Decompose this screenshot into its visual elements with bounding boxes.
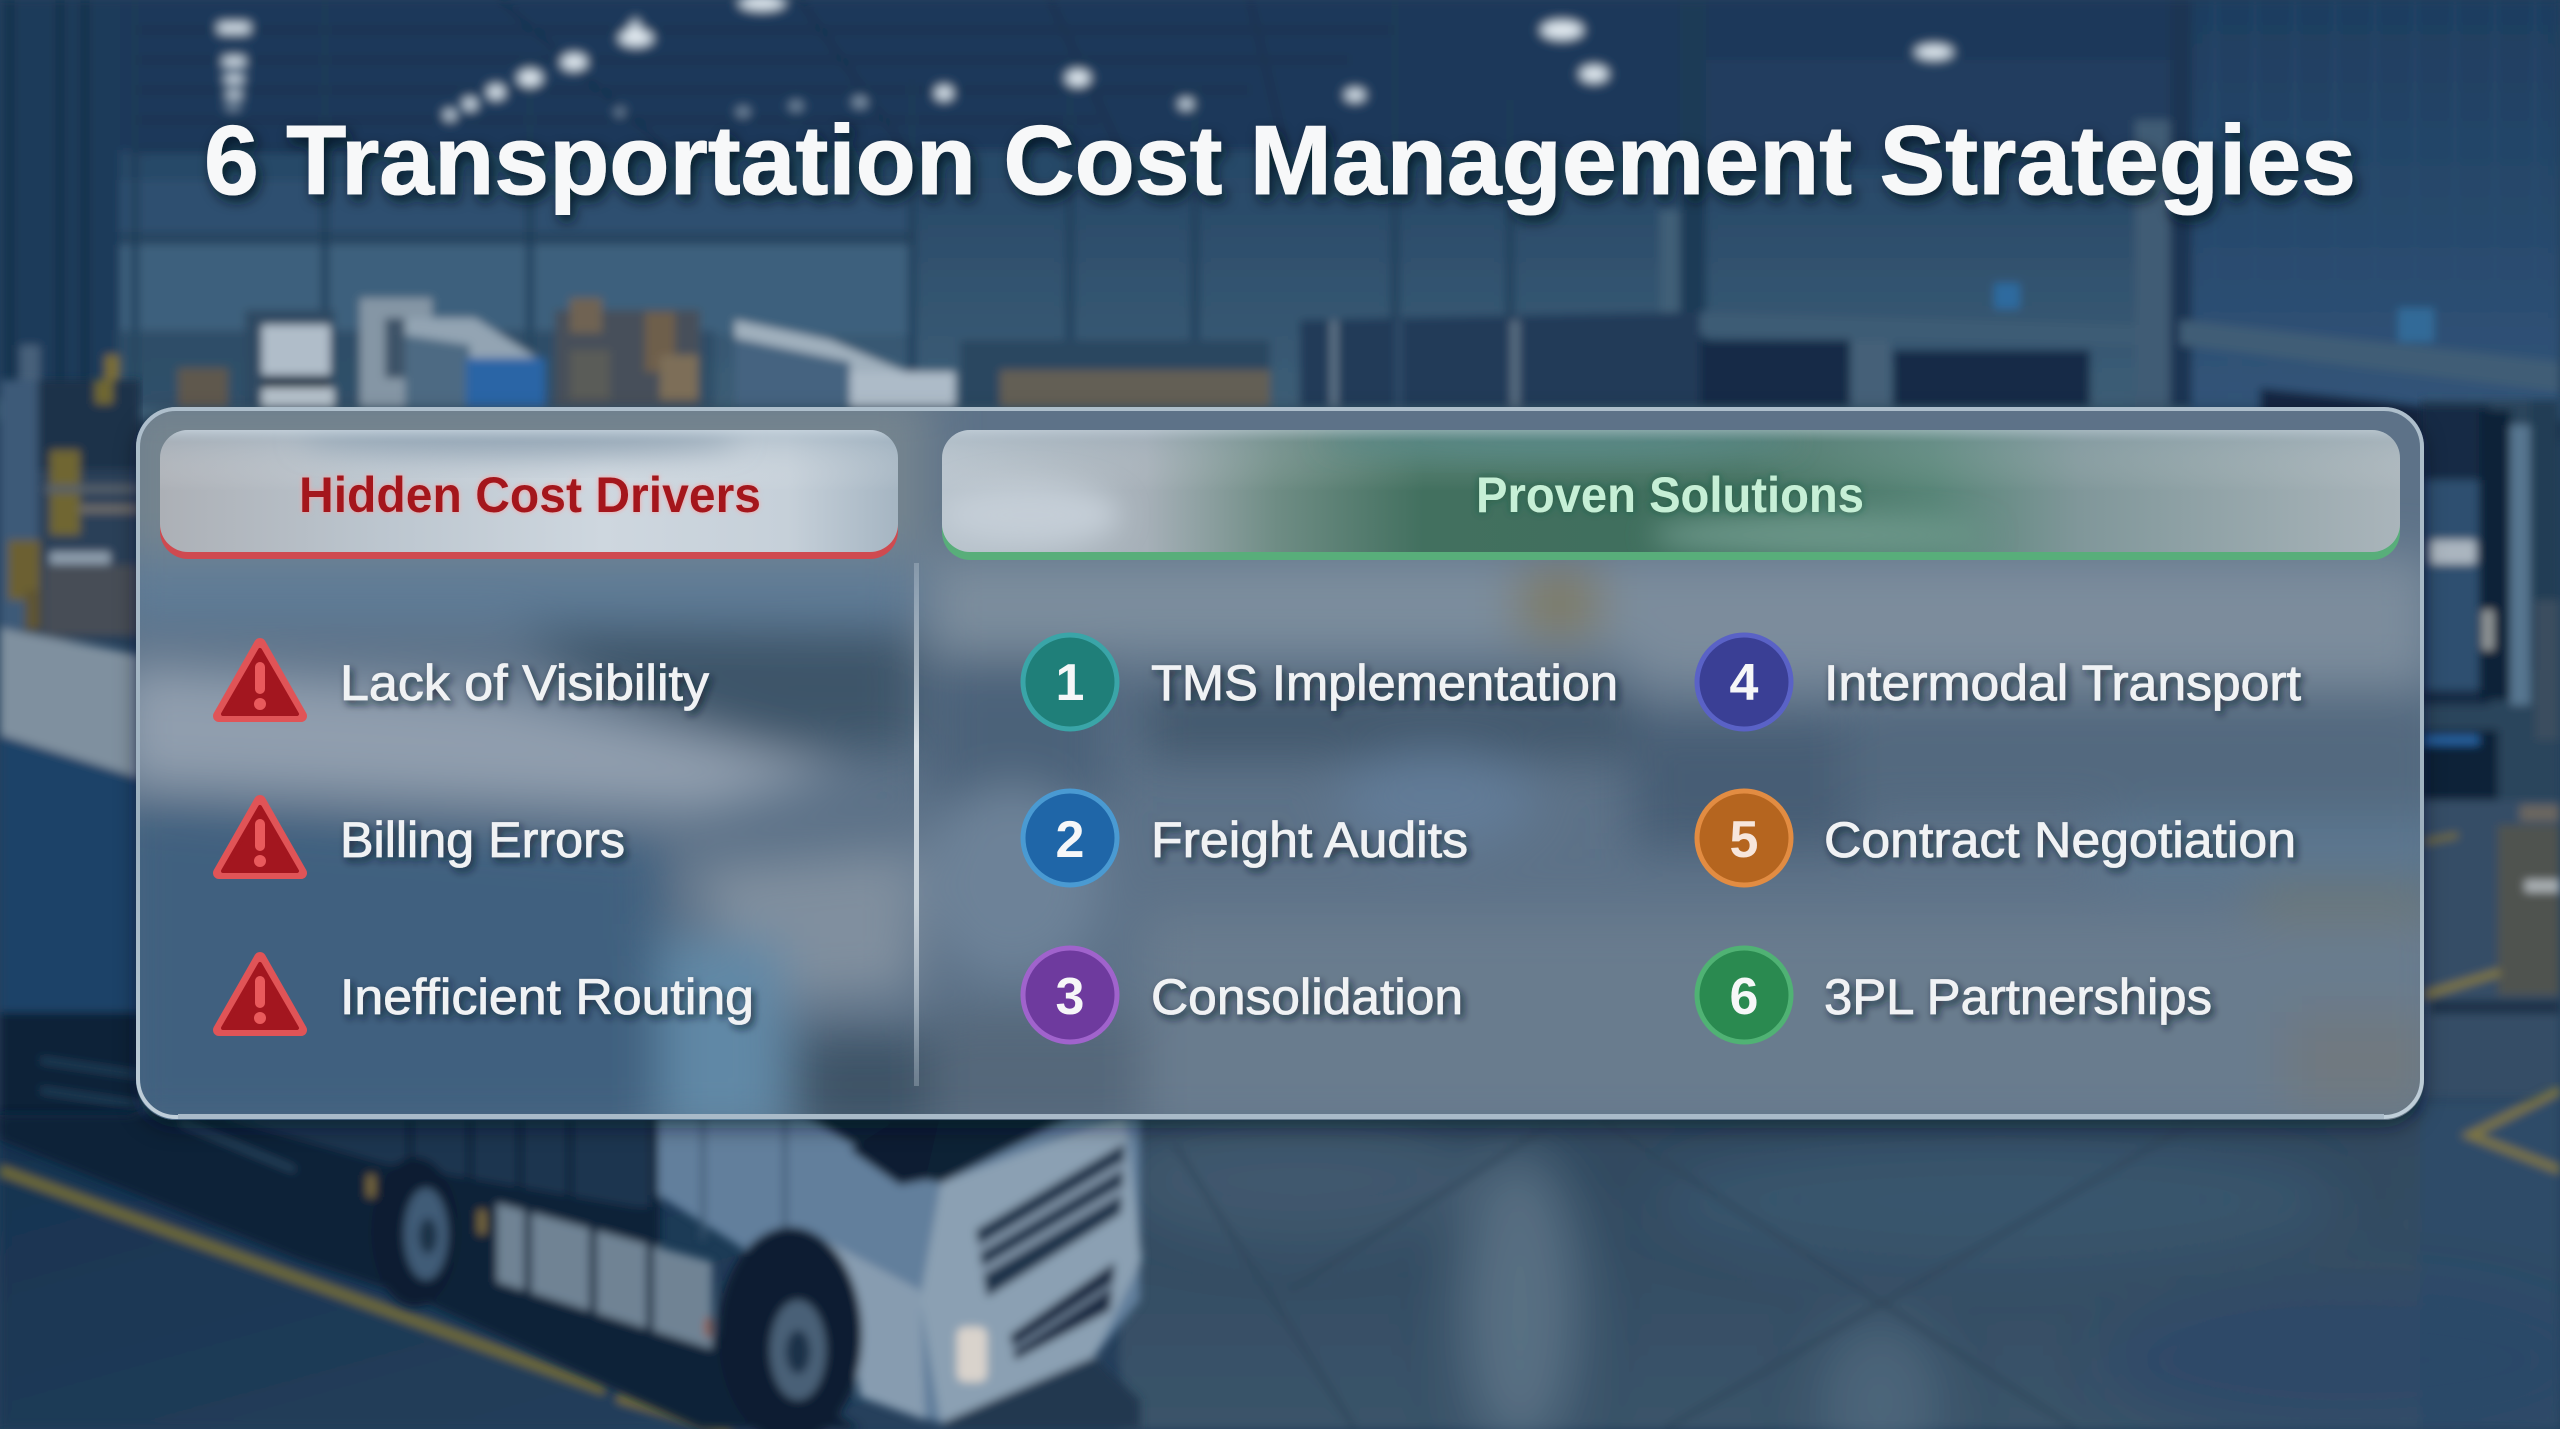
truck — [0, 1105, 1142, 1429]
solution 1: TMS Implementation — [1023, 635, 1618, 729]
solution 2: Freight Audits: 2 — [1056, 811, 1084, 869]
back vehicles and boxes — [115, 330, 715, 407]
panel glass blur: blurred shapes seen through the panel — [115, 392, 2449, 1135]
item: Billing Errors — [219, 801, 625, 873]
solution 6: 3PL Partnerships — [1697, 948, 2212, 1042]
header: Proven Solutions — [940, 428, 2400, 560]
solution 5: Contract Negotiation: 5 — [1730, 811, 1758, 869]
back wall and ceiling — [0, 0, 2560, 440]
icon: warning triangle — [219, 644, 301, 716]
left side beyond panel — [0, 380, 140, 1132]
icon: warning triangle — [219, 801, 301, 873]
solution 3: Consolidation — [1023, 948, 1463, 1042]
solution 4: Intermodal Transport: 4 — [1730, 654, 1759, 712]
header text: Hidden Cost Drivers: Hidden Cost Drivers — [299, 467, 761, 523]
solution 5: Contract Negotiation — [1697, 791, 2296, 885]
floor — [0, 1090, 2560, 1429]
solution 6: 3PL Partnerships: 6 — [1730, 968, 1758, 1026]
solution 6: 3PL Partnerships: 3PL Partnerships — [1824, 969, 2212, 1025]
lights — [217, 0, 1954, 121]
list: hidden cost drivers — [219, 644, 754, 1030]
item: Inefficient Routing — [219, 958, 754, 1030]
solution 1: TMS Implementation: 1 — [1056, 654, 1084, 712]
solution 2: Freight Audits: Freight Audits — [1151, 812, 1468, 868]
list: proven solutions — [1023, 635, 2301, 1042]
solution 5: Contract Negotiation: Contract Negotiation — [1824, 812, 2296, 868]
item: Inefficient Routing: Inefficient Routing — [340, 969, 754, 1025]
item: Billing Errors: Billing Errors — [340, 812, 625, 868]
item: Lack of Visibility: Lack of Visibility — [340, 655, 709, 711]
solution 1: TMS Implementation: TMS Implementation — [1151, 655, 1618, 711]
dock doors — [1300, 312, 1700, 407]
column divider — [914, 563, 919, 1086]
item: Lack of Visibility — [219, 644, 709, 716]
solution 3: Consolidation: Consolidation — [1151, 969, 1463, 1025]
header text: Proven Solutions: Proven Solutions — [1476, 467, 1864, 523]
solution 2: Freight Audits — [1023, 791, 1468, 885]
solution 4: Intermodal Transport: Intermodal Transport — [1824, 655, 2301, 711]
header: Hidden Cost Drivers — [160, 420, 898, 559]
right side beyond panel — [2420, 400, 2560, 1100]
solution 3: Consolidation: 3 — [1056, 968, 1084, 1026]
glass panel — [115, 392, 2449, 1135]
icon: warning triangle — [219, 958, 301, 1030]
solution 4: Intermodal Transport — [1697, 635, 2301, 729]
title: 6 Transportation Cost Management Strategies — [204, 105, 2356, 215]
